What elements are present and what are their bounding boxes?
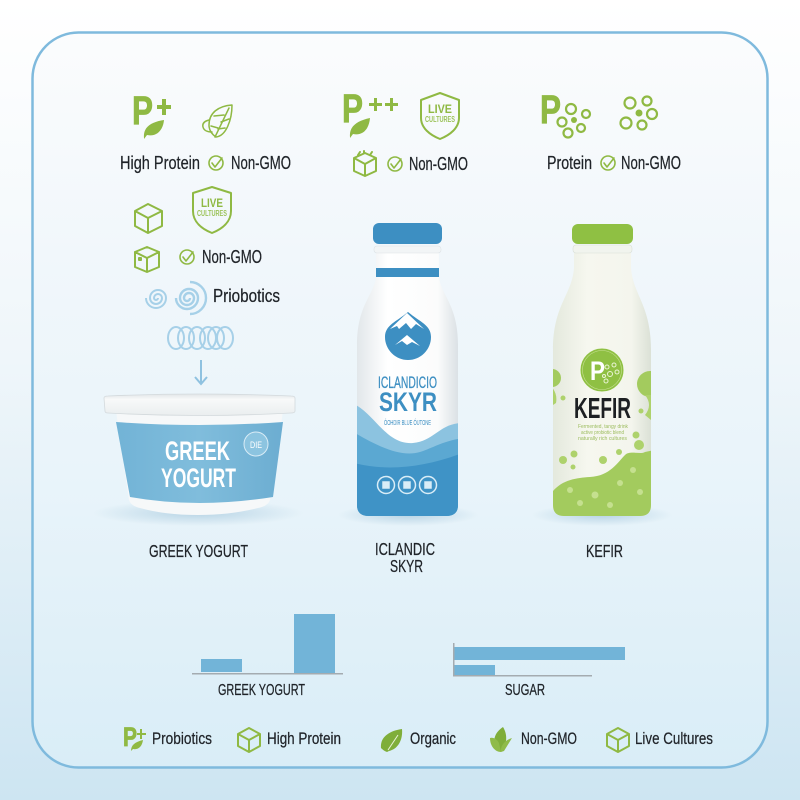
label: chart: GREEK YOGURT <box>218 682 305 699</box>
bottle cap <box>373 223 442 244</box>
icon: P+ leaf: P <box>132 89 153 133</box>
label: ICLANDIC SKYR <box>375 539 435 576</box>
label: small print: ÓOHDIR BLUE ÓUTONE <box>384 418 431 427</box>
column 3 text row <box>547 153 681 173</box>
icon: P circle logo: P <box>590 356 605 386</box>
label: chart: SUGAR <box>505 682 545 699</box>
label: KEFIR: KEFIR <box>574 393 631 425</box>
icon: open box <box>354 151 376 176</box>
legend: high protein <box>238 728 341 752</box>
bottle badges <box>378 476 436 494</box>
label: YOGURT on tub: YOGURT <box>161 463 236 493</box>
seal: DIE <box>250 440 262 450</box>
label: GREEK on tub: GREEK <box>165 436 230 466</box>
seal <box>244 432 268 456</box>
legend: probiotics: P <box>123 722 137 752</box>
bottle neck ring <box>573 245 632 253</box>
label: GREEK YOGURT: GREEK YOGURT <box>149 541 248 561</box>
legend: probiotics <box>123 722 212 752</box>
label: Priobotics: Priobotics <box>213 286 280 306</box>
bar chart: Greek yogurt <box>192 614 343 699</box>
label: Protein: Protein <box>547 153 592 173</box>
icon: live cultures shield <box>421 93 459 139</box>
bottle cap <box>572 224 633 244</box>
label: ICLANDIC SKYR: ICLANDIC <box>375 539 435 559</box>
icon: live cultures shield: CULTURES <box>197 209 227 218</box>
label: small print: active probiotic blend <box>581 430 624 436</box>
column 1 top icons <box>132 89 232 139</box>
icon: cube <box>135 204 162 233</box>
legend <box>123 722 713 752</box>
label: small print: naturally rich cultures <box>578 436 627 442</box>
label: Non-GMO: Non-GMO <box>231 153 291 173</box>
product: Kefir bottle <box>544 224 660 524</box>
icon: outline leaf <box>203 105 232 137</box>
icon: check <box>209 156 223 170</box>
label: SKYR: SKYR <box>379 387 437 417</box>
label: Non-GMO: Non-GMO <box>409 154 468 174</box>
label: small print <box>578 424 628 442</box>
column 2 text row <box>354 151 468 176</box>
bar chart: sugar <box>453 643 625 699</box>
icon: check <box>601 156 615 170</box>
bottle neck ring <box>374 246 441 253</box>
icon: P++ leaf: P <box>342 87 363 131</box>
legend: organic: Organic <box>410 729 456 748</box>
legend: live cultures: Live Cultures <box>635 729 713 748</box>
icon: check <box>180 250 194 264</box>
label: High Protein: High Protein <box>120 153 200 173</box>
icon: check <box>388 157 402 171</box>
label: brand name: ICLANDICIO <box>378 373 437 392</box>
icon: live cultures shield: LIVE <box>428 104 452 116</box>
icon: open box <box>135 247 159 272</box>
icon: live cultures shield: LIVE <box>201 198 223 210</box>
label: small print: Fermented, tangy drink <box>578 424 628 430</box>
column 3 top icons <box>540 88 657 138</box>
label: Non-GMO: Non-GMO <box>202 247 262 267</box>
label: ICLANDIC SKYR: SKYR <box>390 556 423 576</box>
arrow: down to yogurt <box>195 360 207 384</box>
left feature stack <box>135 187 280 384</box>
legend: organic <box>381 729 456 752</box>
label: Non-GMO: Non-GMO <box>621 153 681 173</box>
legend: non-gmo: Non-GMO <box>521 729 577 748</box>
icon: P circle logo <box>580 348 624 392</box>
icon: coil <box>168 327 233 349</box>
icon: mountain logo <box>385 312 431 360</box>
label: KEFIR: KEFIR <box>586 541 623 561</box>
legend: probiotics: Probiotics <box>152 729 212 748</box>
icon: live cultures shield <box>193 187 231 233</box>
icon: live cultures shield: CULTURES <box>425 115 455 124</box>
legend: live cultures <box>607 728 713 752</box>
product: Greek yogurt tub <box>93 394 303 526</box>
icon: small spiral <box>146 290 166 308</box>
bubbles <box>559 396 644 470</box>
column 1 text row <box>120 153 291 173</box>
product: Icelandic skyr bottle <box>350 223 466 524</box>
icon: culture cluster <box>620 96 657 130</box>
column 2 top icons <box>342 87 459 139</box>
icon: large spiral <box>176 282 206 314</box>
legend: high protein: High Protein <box>267 729 341 748</box>
icon: P with cultures: P <box>540 88 561 132</box>
legend: non-gmo <box>490 727 577 752</box>
